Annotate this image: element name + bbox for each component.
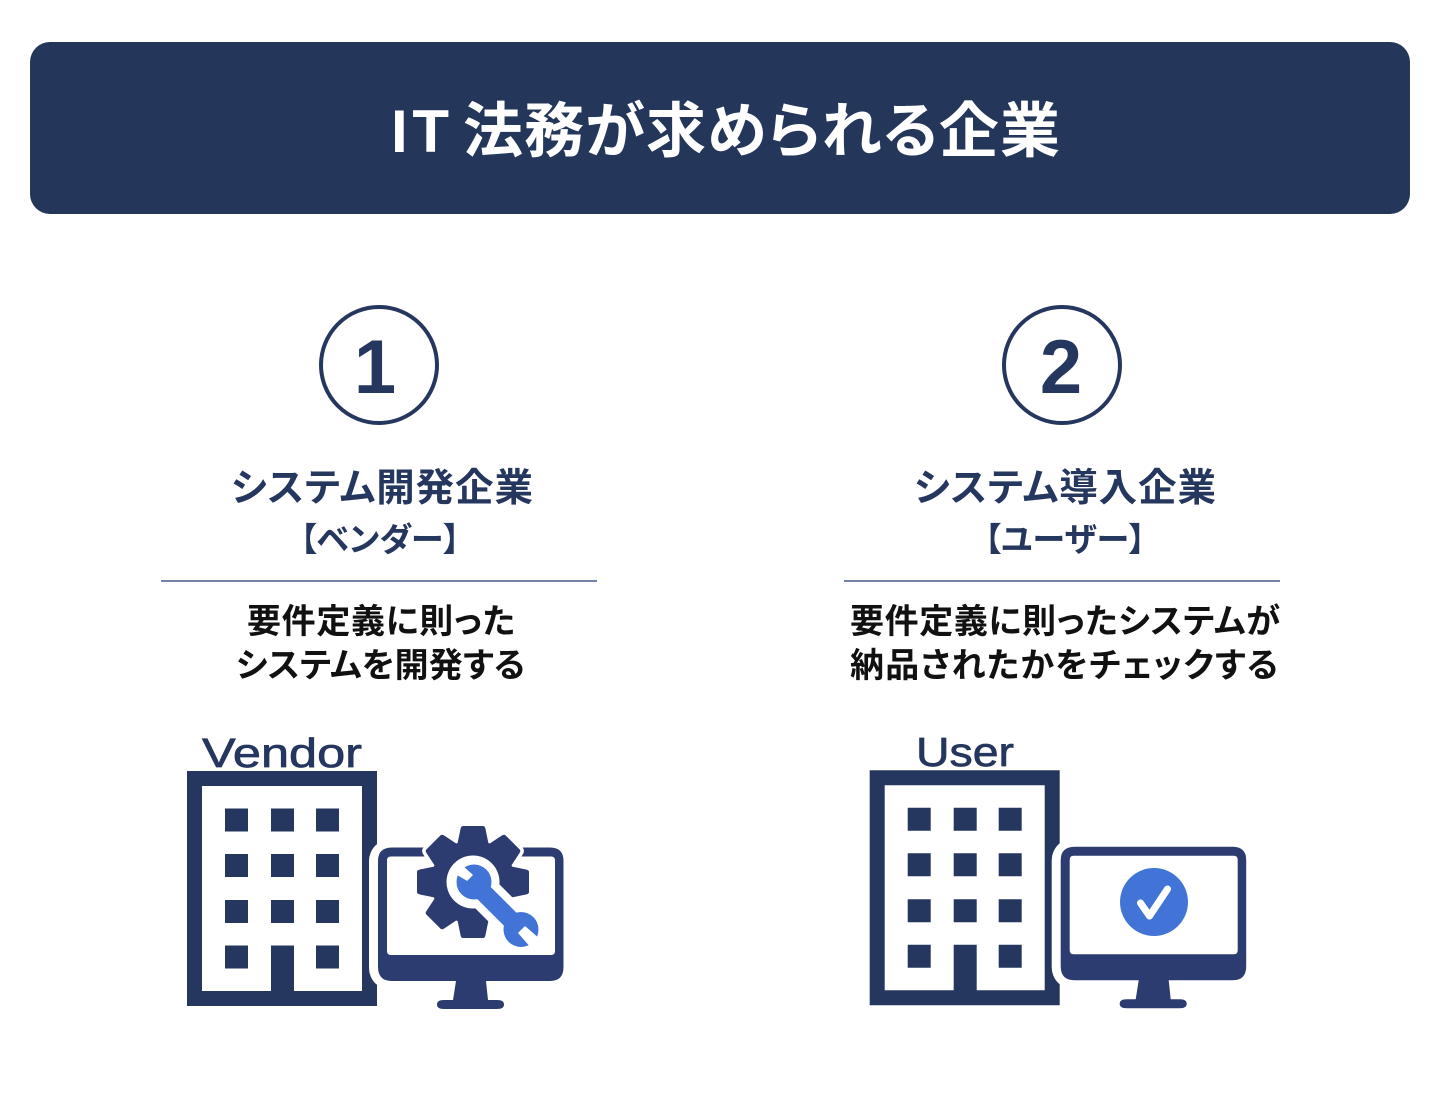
icon: gear [417,826,529,938]
user subheading: 【ユーザー】 [985,521,1145,558]
vendor description [236,603,525,685]
user heading: システム導入企業 [914,467,1216,510]
vendor description: システムを開発する [236,647,525,685]
icon: user monitor with check [1052,838,1255,1008]
title: 法務が求められる企業 [463,98,1060,165]
vendor heading: システム開発企業 [231,467,533,510]
number badge 1: 1 [354,325,396,410]
panel: user [844,307,1280,1008]
number badge 2: 2 [1040,325,1082,410]
icon: check badge [1120,868,1188,936]
title banner [30,42,1410,214]
user label: User [916,729,1014,775]
icon: vendor monitor with gear and wrench [369,826,572,1009]
title: IT [391,98,449,165]
number badge 1 [321,307,437,423]
user description: 納品されたかをチェックする [850,647,1278,685]
number badge 2 [1004,307,1120,423]
vendor description: 要件定義に則った [247,603,515,641]
panel: vendor [161,307,597,1009]
user description: 要件定義に則ったシステムが [850,602,1280,641]
vendor label: Vendor [202,730,362,776]
vendor subheading: 【ベンダー】 [300,521,460,558]
user description [850,602,1280,685]
icon: vendor building [187,771,377,1006]
icon: wrench [455,864,541,949]
icon: user building [870,770,1060,1005]
